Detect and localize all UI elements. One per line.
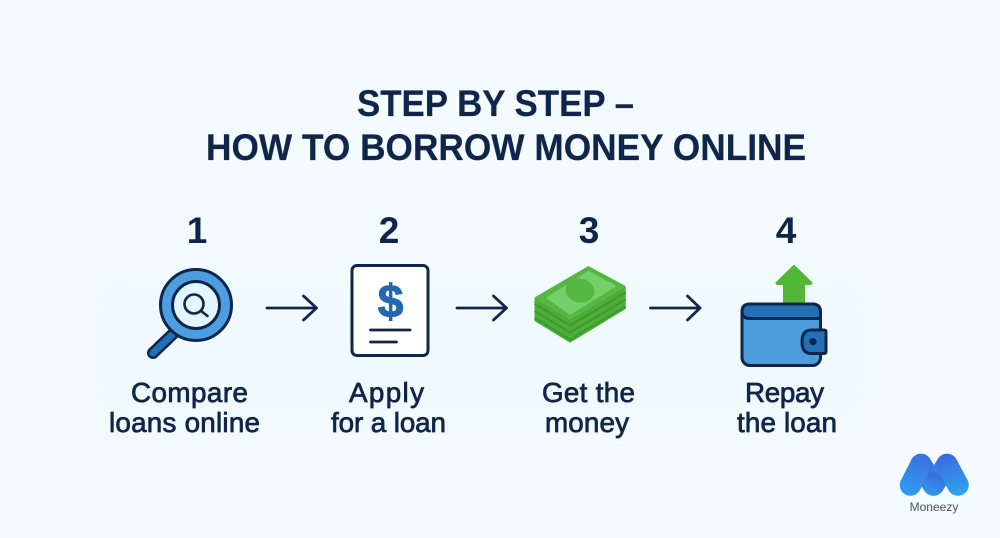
icon: magnifying glass bbox=[153, 270, 232, 353]
label: apply for a loan: for a loan bbox=[331, 407, 446, 438]
step number 2: 2 bbox=[379, 210, 399, 251]
arrow 1 to 2 bbox=[267, 296, 316, 320]
title: HOW TO BORROW MONEY ONLINE bbox=[206, 126, 806, 168]
title bbox=[206, 82, 806, 168]
step number 1: 1 bbox=[187, 210, 207, 251]
icon: loan document: $ bbox=[378, 275, 403, 327]
label: repay the loan: Repay bbox=[745, 377, 824, 408]
icon: stack of green banknotes bbox=[534, 266, 626, 343]
label: apply for a loan bbox=[331, 377, 446, 438]
label: apply for a loan: Apply bbox=[349, 377, 424, 408]
label: compare loans online: loans online bbox=[109, 407, 260, 438]
icon: up arrow bbox=[776, 264, 812, 305]
label: compare loans online: Compare bbox=[131, 377, 248, 408]
label: compare loans online bbox=[109, 377, 260, 438]
step number 4: 4 bbox=[776, 210, 797, 251]
arrow 2 to 3 bbox=[457, 296, 506, 320]
label: get the money: Get the bbox=[542, 377, 635, 408]
label: get the money: money bbox=[545, 407, 629, 438]
arrow 3 to 4 bbox=[650, 296, 700, 320]
label: get the money bbox=[542, 377, 635, 438]
label: repay the loan: the loan bbox=[737, 407, 837, 438]
title: STEP BY STEP – bbox=[357, 82, 634, 124]
step 1: compare loans online bbox=[109, 210, 260, 438]
logo: Moneezy bbox=[910, 464, 958, 514]
logo wordmark: Moneezy bbox=[910, 500, 958, 514]
icon: loan document bbox=[352, 266, 428, 356]
step 2: apply for a loan bbox=[331, 210, 446, 438]
logo mark bbox=[910, 464, 958, 485]
step 3: get the money bbox=[534, 210, 635, 438]
step number 3: 3 bbox=[579, 210, 599, 251]
icon: wallet bbox=[742, 304, 826, 366]
step 4: repay the loan bbox=[737, 210, 837, 438]
label: repay the loan bbox=[737, 377, 837, 438]
